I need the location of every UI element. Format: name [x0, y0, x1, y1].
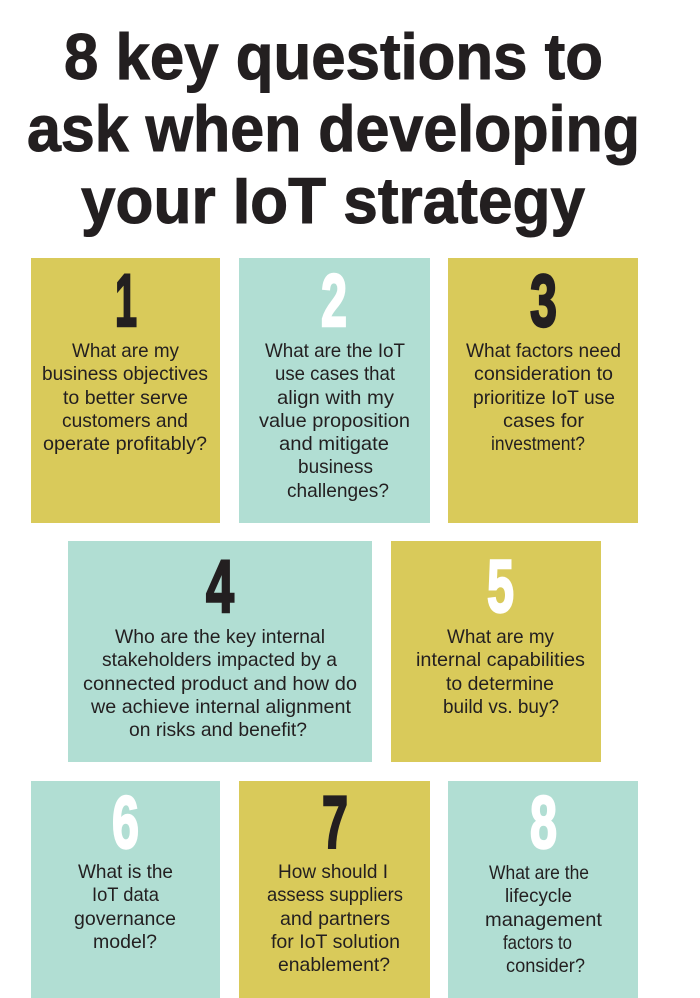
panel: question 6: What is the [78, 861, 173, 883]
panel: question 7: enablement? [278, 954, 390, 976]
panel: question 1: customers and [62, 410, 188, 432]
panel: question 2: align with my [277, 387, 394, 409]
panel: question 7: for IoT solution [271, 931, 400, 953]
panel: question 5: build vs. buy? [443, 696, 559, 718]
panel: question 6: model? [93, 931, 157, 953]
panel: question 1 [31, 258, 220, 523]
panel: question 5 [391, 541, 601, 762]
panel: question 5: to determine [446, 673, 554, 695]
panel: question 6: governance [74, 908, 176, 930]
panel: question 5: What are my [447, 626, 554, 648]
panel: question 6: 6 [112, 781, 139, 864]
title: your IoT strategy [81, 164, 585, 237]
panel: question 6 [31, 781, 220, 998]
panel: question 8: lifecycle [505, 885, 572, 907]
panel: question 4: on risks and benefit? [129, 719, 307, 741]
panel: question 4 [68, 541, 372, 762]
panel: question 4: we achieve internal alignment [90, 696, 352, 718]
panel: question 2: 2 [321, 259, 347, 342]
title [27, 20, 640, 237]
panel: question 8: consider? [506, 955, 585, 977]
panel: question 2: value proposition [259, 410, 410, 432]
panel: question 7: How should I [278, 861, 388, 883]
panel: question 1: to better serve [63, 387, 188, 409]
panel: question 7: 7 [322, 781, 348, 864]
panel: question 2: use cases that [275, 363, 396, 385]
panel: question 2 [239, 258, 430, 523]
panel: question 1: 1 [115, 259, 137, 342]
panel: question 1: What are my [72, 340, 179, 362]
panel: question 4: Who are the key internal [115, 626, 325, 648]
panel: question 2: and mitigate [279, 433, 389, 455]
panel: question 8 [448, 781, 638, 998]
panel: question 3: consideration to [474, 363, 613, 385]
panel: question 2: What are the IoT [265, 340, 405, 362]
panel: question 7 [239, 781, 430, 998]
panel: question 3 [448, 258, 638, 523]
panel: question 5: internal capabilities [416, 649, 585, 671]
panel: question 8: factors to [503, 932, 572, 954]
title: ask when developing [27, 92, 640, 165]
panel: question 2: business [298, 456, 373, 478]
panel: question 2: challenges? [287, 480, 389, 502]
panel: question 5: 5 [487, 545, 514, 628]
panel: question 1: business objectives [42, 363, 208, 385]
panel: question 1: operate profitably? [43, 433, 207, 455]
panel: question 8: management [485, 909, 603, 931]
panel: question 8: What are the [489, 862, 589, 884]
panel: question 8: 8 [530, 781, 557, 864]
panel: question 4: stakeholders impacted by a [102, 649, 337, 671]
panel: question 3: What factors need [466, 340, 621, 362]
panel: question 4: 4 [206, 545, 234, 628]
panel: question 3: 3 [530, 259, 557, 342]
panel: question 3: prioritize IoT use [473, 387, 615, 409]
panel: question 7: and partners [280, 908, 390, 930]
panel: question 3: investment? [491, 433, 585, 455]
panel: question 7: assess suppliers [267, 884, 403, 906]
panel: question 4: connected product and how do [83, 673, 357, 695]
title: 8 key questions to [64, 20, 603, 93]
panel: question 6: IoT data [92, 884, 159, 906]
panel: question 3: cases for [503, 410, 585, 432]
